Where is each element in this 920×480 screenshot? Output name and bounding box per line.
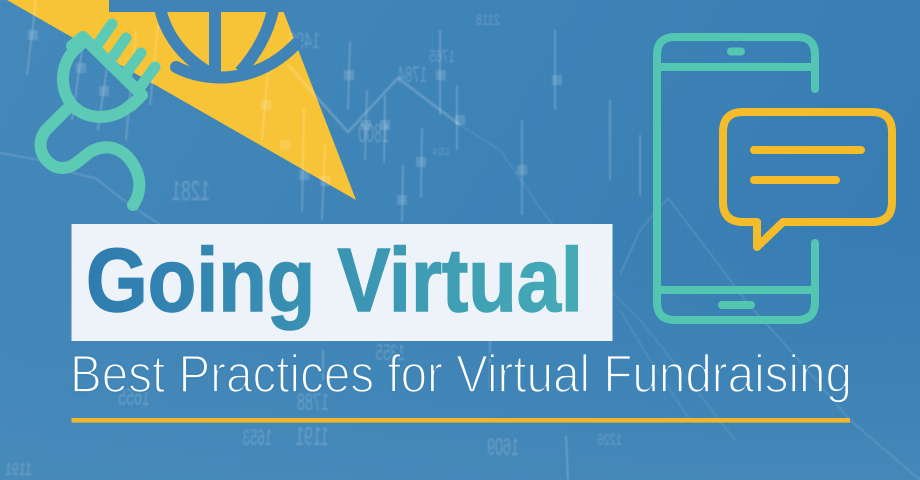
mirrored chart numbers: 1191: [295, 422, 329, 451]
yellow triangle: [7, 0, 356, 200]
mirrored chart numbers: 1609: [487, 434, 519, 461]
mirrored chart numbers: 2945: [231, 220, 263, 245]
mirrored chart numbers: 1191: [5, 460, 32, 480]
subtitle: Best Practices for Virtual Fundraising: [70, 345, 852, 404]
mirrored chart numbers: 1499: [288, 28, 320, 53]
mirrored chart numbers: 1765: [429, 47, 455, 67]
mirrored chart numbers: 1655: [118, 384, 150, 411]
mirrored chart numbers: 1788: [297, 389, 329, 416]
underline rule: [72, 418, 850, 423]
icon: globe: [109, 0, 296, 77]
mirrored chart numbers: 1653: [243, 426, 272, 450]
icon: plug: [41, 24, 155, 205]
mirrored chart numbers: 1324: [433, 146, 450, 158]
mirrored chart numbers: 1784: [398, 63, 427, 87]
title: Going Virtual: [86, 231, 583, 331]
mirrored chart numbers: 1355: [376, 341, 405, 365]
icon: phone: [657, 37, 815, 320]
icon: speech bubble: [723, 112, 892, 247]
mirrored chart numbers: 1281: [171, 175, 210, 206]
mirrored chart numbers: 1226: [597, 430, 622, 448]
mirrored chart numbers: 1800: [358, 120, 390, 148]
mirrored chart numbers: 2118: [476, 10, 500, 28]
mirrored chart numbers: [5, 10, 622, 480]
title panel: [72, 224, 612, 341]
